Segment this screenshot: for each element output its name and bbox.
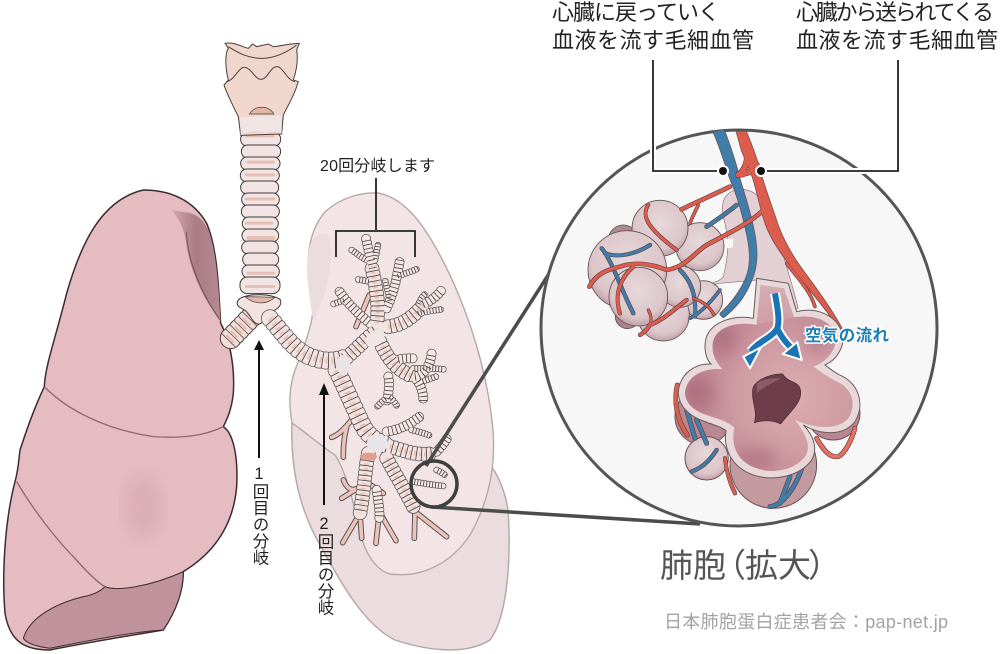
- label: 20 branches: 20回分岐します: [320, 157, 435, 175]
- pink ring tint: [343, 267, 433, 513]
- ring lines: [333, 243, 446, 486]
- label: first branching: 1回目の分岐: [250, 465, 269, 566]
- panel: left lung: [4, 190, 237, 650]
- panel: right lung: [290, 193, 509, 650]
- label: air flow: 空気の流れ: [805, 326, 890, 345]
- label: veins capillaries: 血液を流す毛細血管: [552, 28, 754, 53]
- inner lobe shading: [685, 325, 827, 468]
- heading: alveoli magnified: 肺胞: [660, 547, 726, 584]
- blue capillaries: [602, 130, 757, 318]
- pink ring shading: [245, 133, 275, 288]
- arrow: first branching: [254, 340, 264, 458]
- magnified circle with connector lines: [411, 130, 937, 526]
- alveolus cut rim: [678, 278, 860, 478]
- tracheal rings: [240, 133, 281, 294]
- terminal forked bronchi: [332, 295, 447, 543]
- alveoli illustration: [588, 130, 860, 508]
- large circle: [541, 130, 937, 526]
- upper lobe: [290, 193, 494, 575]
- soft shading on middle lobe: [123, 473, 163, 540]
- callout dots: [717, 165, 767, 177]
- scalloped outlines: [270, 238, 448, 518]
- bronchial junction highlights: [367, 434, 388, 453]
- lower lobe underside: [23, 572, 183, 648]
- label: veins capillaries: 心臓に戻っていく: [552, 0, 720, 25]
- larynx cartilage: [224, 43, 299, 135]
- air flow arrow: [751, 293, 795, 352]
- bronchial tree: [270, 238, 448, 543]
- vessels on alveolus body: [676, 385, 855, 507]
- lung fissures: [17, 387, 223, 587]
- trachea and larynx: [224, 43, 299, 342]
- left alveolar cluster: [588, 200, 724, 341]
- heading: alveoli magnified: （: [713, 547, 746, 584]
- source credit: 日本肺胞蛋白症患者会：pap-net.jp: [664, 612, 948, 632]
- central opening: [753, 374, 801, 424]
- callout lines: capillaries: [653, 60, 898, 171]
- heading: alveoli magnified: 拡大: [745, 547, 811, 584]
- red capillaries: [589, 132, 842, 335]
- bracket: 20 branches: [336, 178, 415, 257]
- connector lines: [426, 255, 700, 524]
- carina: [237, 295, 281, 324]
- alveolus inner surface: [685, 285, 853, 471]
- label: arteries capillaries: 血液を流す毛細血管: [796, 28, 998, 53]
- heading: alveoli magnified: ）: [808, 547, 841, 584]
- shaded medial surface: [172, 210, 221, 322]
- lower lobe: [292, 420, 509, 650]
- label: arteries capillaries: 心臓から送られてくる: [796, 0, 994, 25]
- label: second branching: 2回目の分岐: [315, 515, 334, 616]
- small target circle: [411, 461, 457, 507]
- callout line halos: [653, 60, 898, 171]
- alveolar duct: [697, 189, 798, 318]
- left main bronchus: [227, 317, 252, 342]
- alveolus rear body: [675, 387, 860, 508]
- arrow: second branching: [319, 383, 329, 505]
